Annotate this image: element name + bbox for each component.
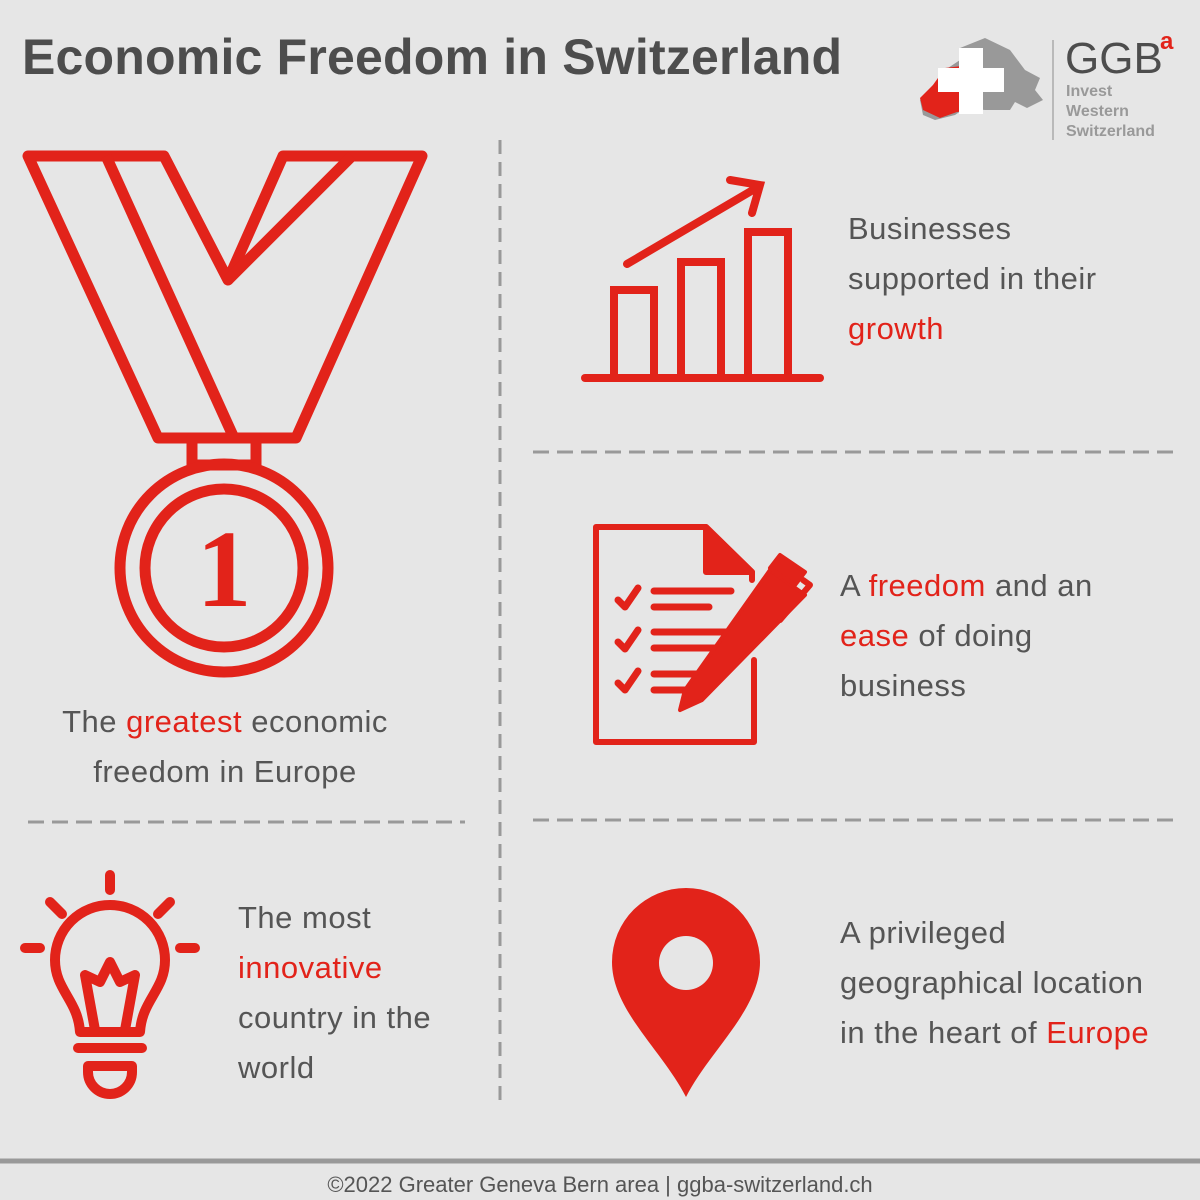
- title: Economic Freedom in Switzerland: [22, 29, 842, 85]
- logo: Switzerland: [1066, 123, 1155, 140]
- footer: ©2022 Greater Geneva Bern area | ggba-switzerland.ch: [327, 1172, 873, 1197]
- text: freedom: A freedom and an ease of doing business: [840, 568, 1093, 703]
- icon: medal: 1: [196, 508, 252, 630]
- text: innovative: The most innovative country in the world: [238, 900, 431, 1085]
- text: location: A privileged geographical location in the heart of Europe: [840, 915, 1149, 1050]
- icon: medal: [22, 150, 428, 678]
- logo: GGB: [1065, 34, 1163, 83]
- logo: Invest: [1066, 83, 1112, 100]
- logo: Western: [1066, 103, 1129, 120]
- icon: growth chart: [581, 176, 824, 382]
- text: greatest: The greatest economic freedom in Europe: [62, 704, 388, 789]
- icon: lightbulb: [20, 870, 200, 1099]
- icon: swiss map: [920, 38, 1043, 120]
- logo: [920, 28, 1174, 140]
- text: growth: Businesses supported in their growth: [848, 211, 1097, 346]
- icon: document with pen: [593, 524, 813, 745]
- logo: a: [1160, 28, 1173, 55]
- icon: location pin: [612, 888, 760, 1097]
